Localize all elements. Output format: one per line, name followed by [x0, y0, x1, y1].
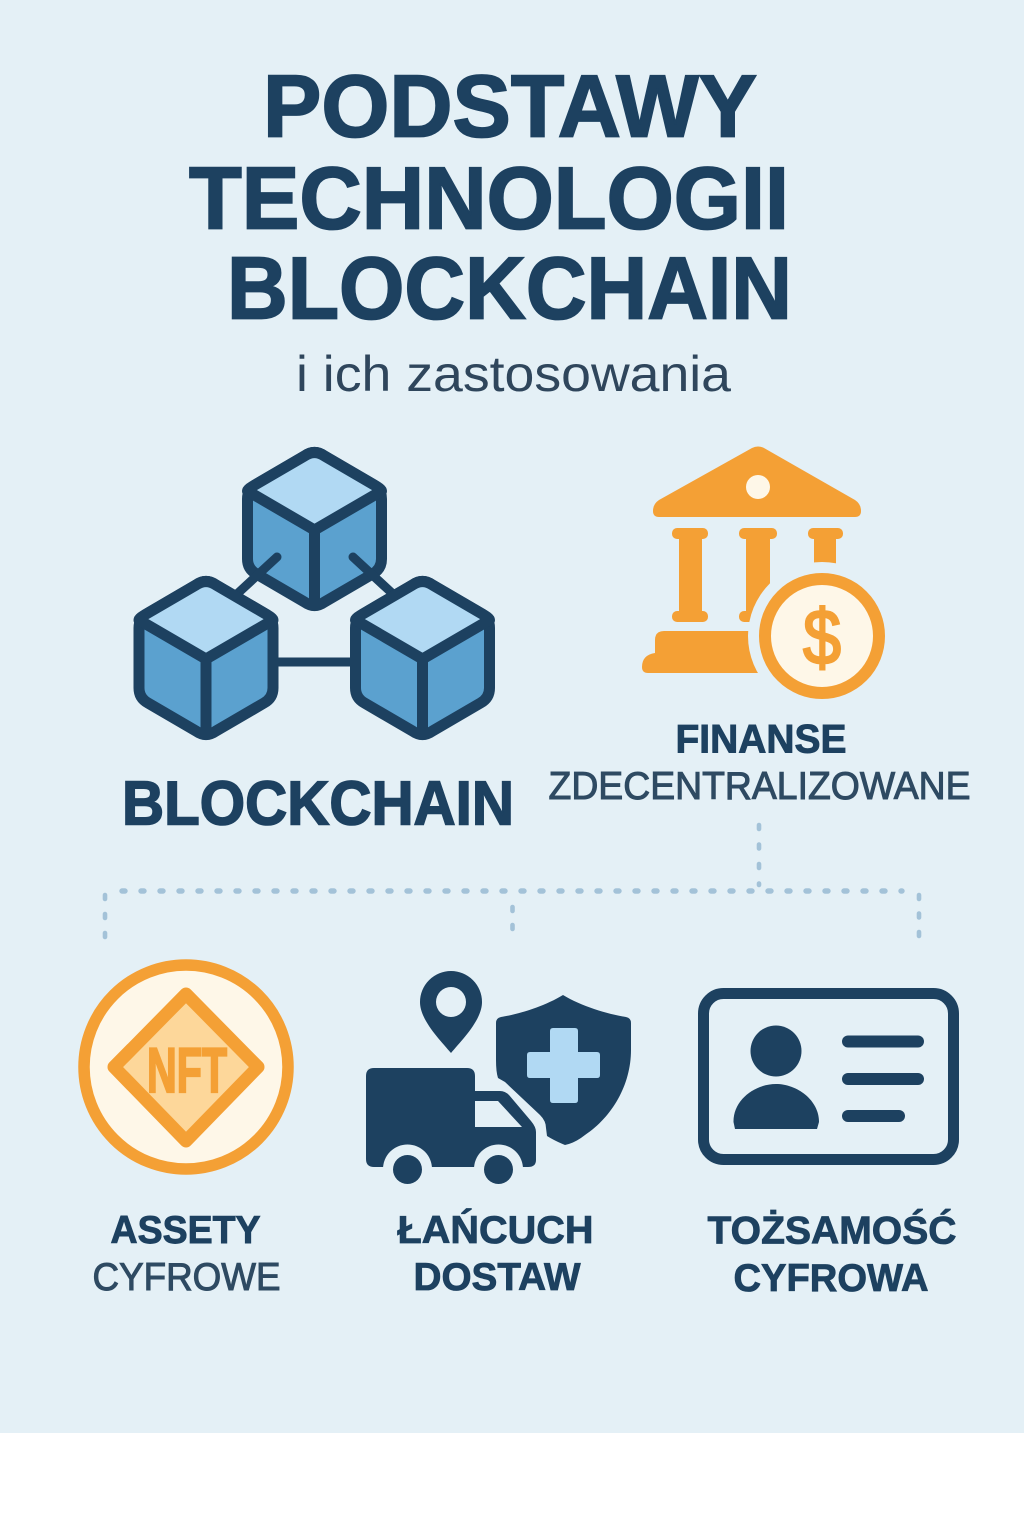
wheels	[393, 1155, 513, 1184]
heading: finanse zdecentralizowane: FINANSE	[676, 718, 846, 762]
wheel arches	[383, 1144, 523, 1194]
text lines	[842, 1036, 924, 1122]
title: BLOCKCHAIN	[227, 238, 792, 338]
coin gap	[748, 562, 896, 710]
diamond	[114, 994, 258, 1141]
right cube	[356, 582, 490, 735]
label: assety cyfrowe	[92, 1209, 280, 1299]
medical cross	[527, 1028, 600, 1103]
truck body	[366, 1068, 536, 1167]
NFT label: NFT	[147, 1036, 227, 1106]
person head	[750, 1026, 802, 1076]
label: tozsamosc cyfrowa	[708, 1208, 956, 1300]
label: lancuch dostaw	[398, 1208, 594, 1299]
location pin	[420, 971, 482, 1053]
truck window	[475, 1101, 522, 1127]
label: assety cyfrowe: ASSETY	[110, 1209, 260, 1252]
card frame	[704, 994, 954, 1160]
top cube	[248, 452, 382, 606]
person body	[733, 1084, 819, 1129]
icon: digital ID card	[704, 994, 954, 1160]
dollar sign: $	[803, 593, 841, 681]
coin	[765, 579, 879, 693]
heading: finanse zdecentralizowane	[548, 718, 970, 808]
left cube	[139, 582, 273, 735]
bank base	[642, 631, 790, 673]
label: lancuch dostaw: DOSTAW	[414, 1256, 581, 1299]
icon: bank with coin	[642, 446, 896, 710]
title: PODSTAWY	[263, 56, 757, 156]
dotted connector lines	[105, 825, 919, 938]
coin circle	[84, 965, 288, 1169]
subtitle: i ich zastosowania	[296, 346, 731, 402]
bank columns	[672, 528, 843, 622]
title: TECHNOLOGII	[189, 148, 789, 248]
heading: blockchain: BLOCKCHAIN	[122, 770, 514, 838]
icon: NFT coin	[84, 965, 288, 1169]
icon: blockchain cubes	[139, 452, 490, 735]
label: tozsamosc cyfrowa: CYFROWA	[734, 1257, 928, 1300]
bank roof	[653, 446, 861, 517]
icon: supply chain	[366, 971, 631, 1194]
label: tozsamosc cyfrowa: TOŻSAMOŚĆ	[708, 1208, 956, 1252]
connector lines	[237, 557, 393, 662]
roof circle	[746, 475, 770, 499]
label: assety cyfrowe: CYFROWE	[92, 1256, 280, 1299]
shield	[496, 995, 631, 1145]
title	[189, 56, 792, 338]
label: lancuch dostaw: ŁAŃCUCH	[398, 1208, 594, 1252]
heading: finanse zdecentralizowane: ZDECENTRALIZOWANE	[548, 765, 970, 808]
